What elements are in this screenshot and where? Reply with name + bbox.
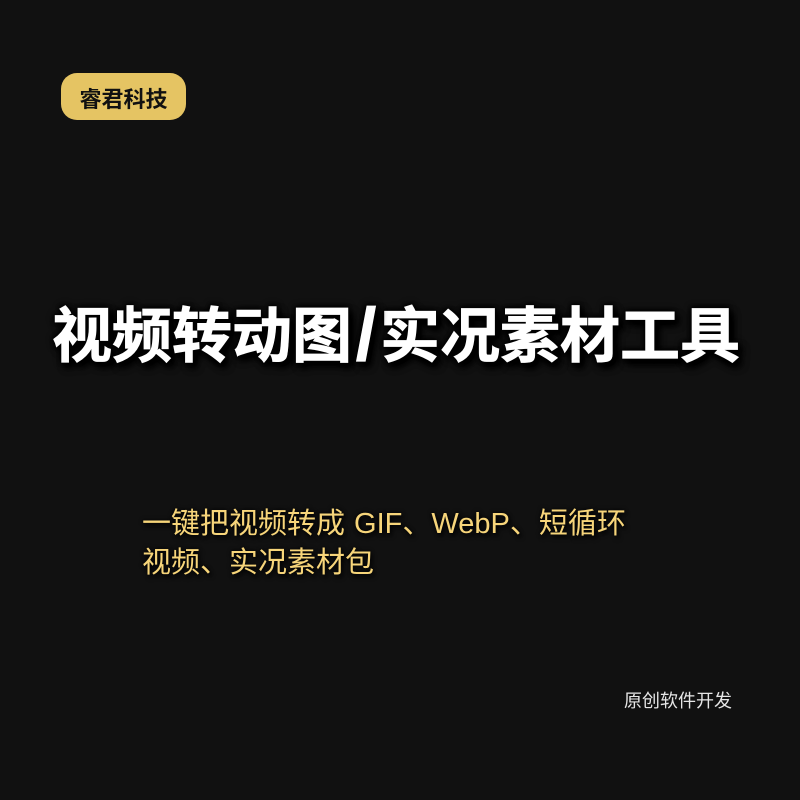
footer note: 原创软件开发 [624,691,732,711]
subtitle text block: 一键把视频转成 GIF、WebP、短循环 [142,508,626,540]
title: 视频转动图 实况素材工具 [52,303,740,370]
subtitle text block: 视频、实况素材包 [142,547,374,579]
subtitle text block [142,508,626,579]
badge: brand name [61,73,186,120]
badge: brand name: 睿君科技 [79,87,168,112]
title: / [356,293,376,376]
